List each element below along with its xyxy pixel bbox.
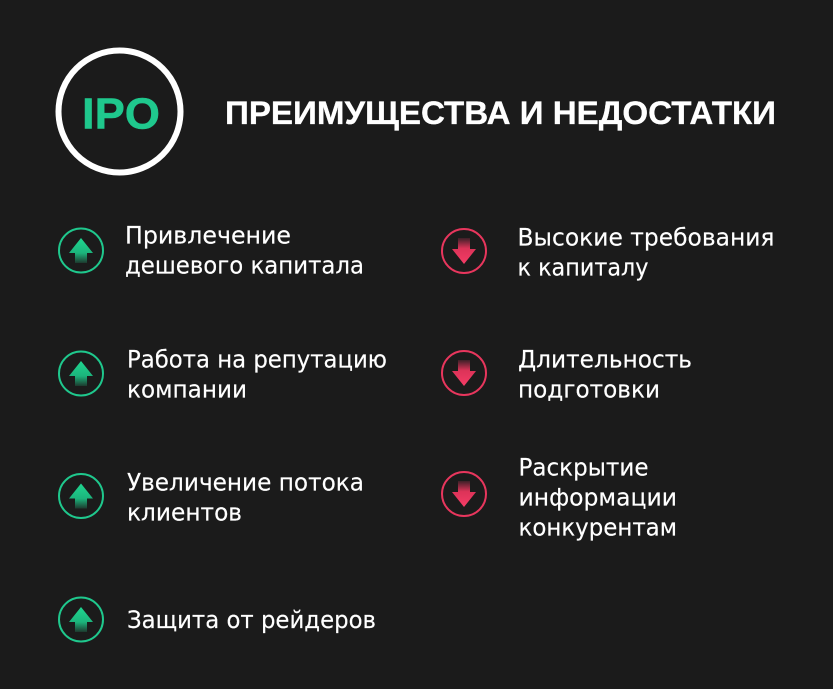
disadvantage: capital requirements — [442, 224, 774, 282]
advantage: client flow: Увеличение потока — [127, 468, 364, 496]
advantage: cheap capital: дешевого капитала — [125, 252, 364, 280]
advantage: client flow: клиентов — [127, 498, 242, 526]
disadvantage: information disclosure: информации — [518, 484, 677, 512]
advantage: reputation: Работа на репутацию — [127, 346, 387, 374]
logo: IPO badge: IPO — [82, 90, 160, 138]
panel: disadvantages — [442, 224, 774, 542]
disadvantage: long preparation — [442, 346, 692, 404]
panel: advantages — [59, 222, 387, 642]
disadvantage: information disclosure — [442, 454, 677, 542]
disadvantage: capital requirements: Высокие требования — [518, 224, 774, 252]
disadvantage: information disclosure: Раскрытие — [518, 454, 648, 482]
disadvantage: long preparation: Длительность — [518, 346, 692, 374]
advantage: client flow — [59, 468, 364, 526]
advantage: cheap capital — [59, 222, 364, 280]
logo: IPO badge — [58, 50, 180, 172]
title: ПРЕИМУЩЕСТВА И НЕДОСТАТКИ — [225, 95, 776, 131]
advantage: raider protection — [59, 598, 376, 642]
advantage: cheap capital: Привлечение — [125, 222, 291, 250]
disadvantage: capital requirements: к капиталу — [518, 254, 648, 282]
advantage: reputation: компании — [127, 376, 247, 404]
disadvantage: information disclosure: конкурентам — [518, 514, 677, 542]
advantage: raider protection: Защита от рейдеров — [127, 606, 376, 634]
advantage: reputation — [59, 346, 387, 404]
disadvantage: long preparation: подготовки — [518, 376, 660, 404]
